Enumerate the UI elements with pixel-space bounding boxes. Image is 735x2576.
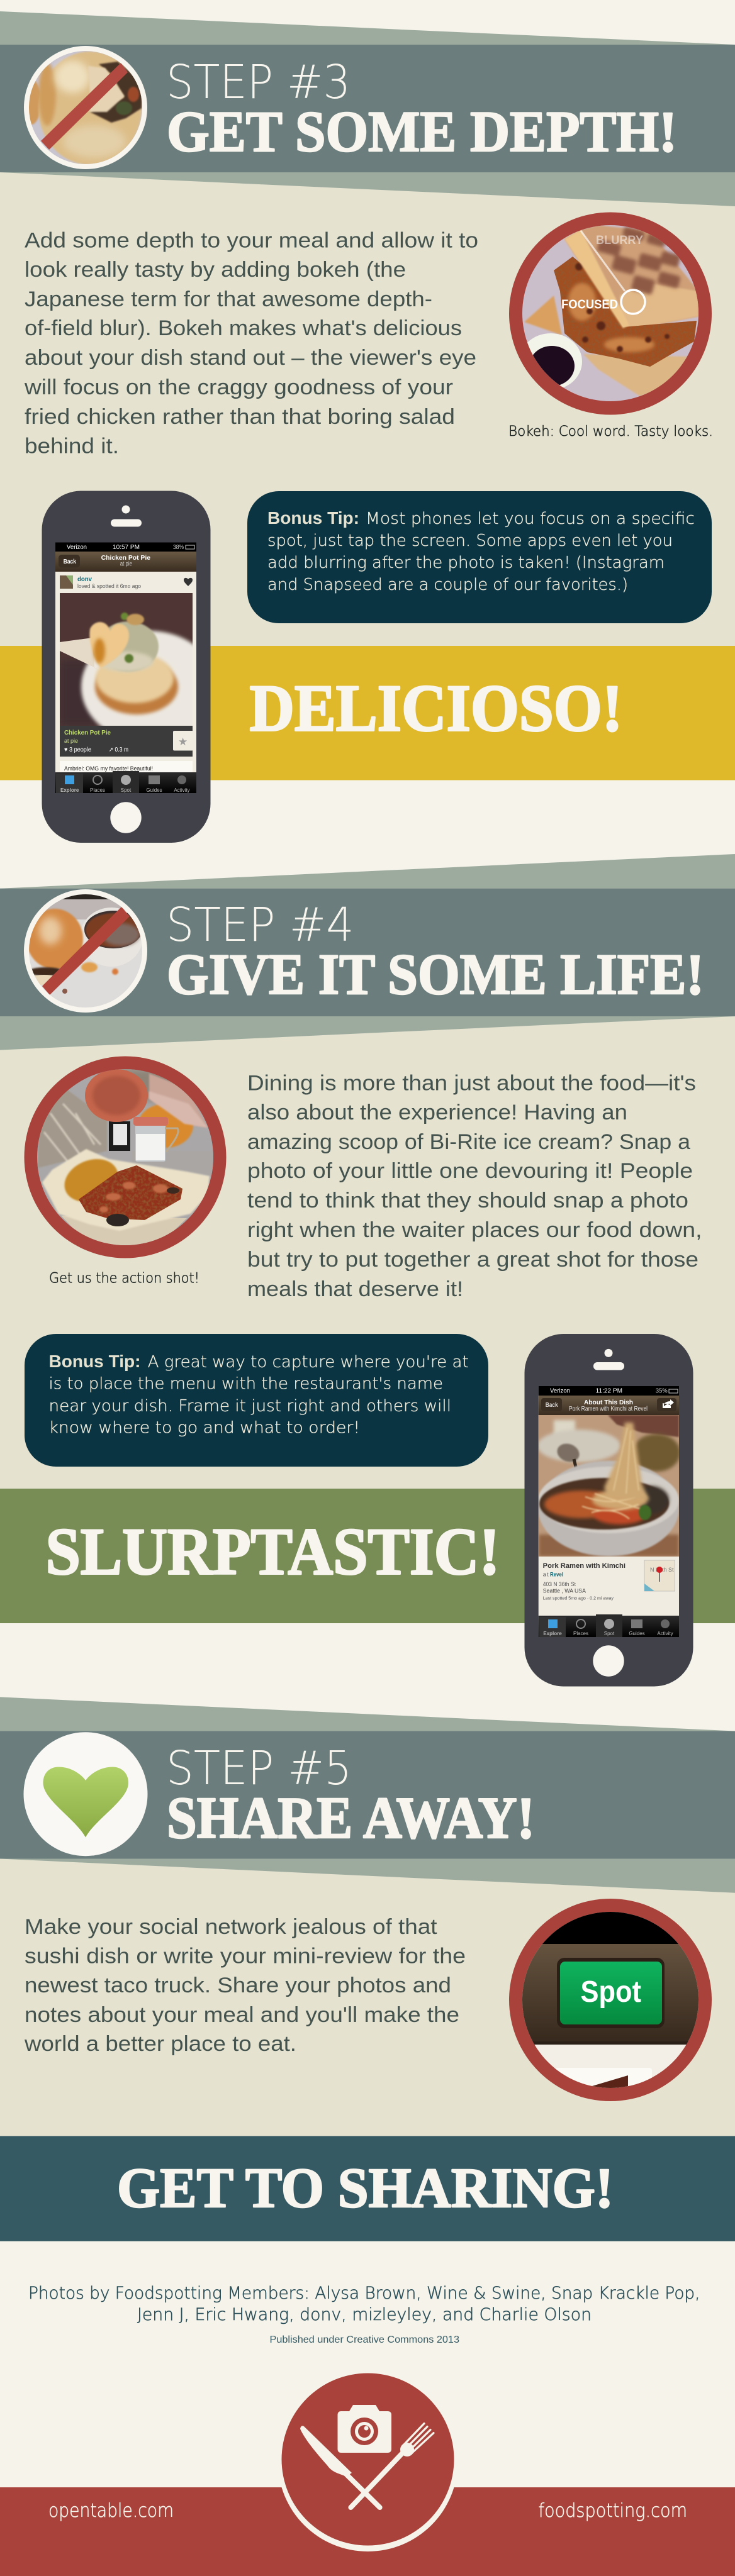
icon: phone with ramen app screen: Activity xyxy=(657,1631,673,1636)
text block: step 4 intro: photo of your little one devouring it! People xyxy=(247,1159,693,1183)
heading: step number: STEP #4 xyxy=(166,898,354,952)
callout: bonus tip 4: know where to go and what to order! xyxy=(49,1419,360,1438)
panel: step 5 xyxy=(0,1697,735,2136)
step 5 body background xyxy=(0,1858,735,2136)
text block: step 5 intro: world a better place to eat. xyxy=(24,2032,296,2056)
callout: bonus tip 4: A great way to capture where you're at xyxy=(148,1353,469,1372)
label: focused: FOCUSED xyxy=(561,298,618,312)
photo: naan plate action shot xyxy=(24,1057,227,1258)
heading: step number: STEP #5 xyxy=(166,1741,352,1796)
icon: phone with chicken pot pie app screen: 10:57 PM xyxy=(113,544,140,551)
panel: footer xyxy=(0,2372,735,2576)
text block: step 3 intro: fried chicken rather than that boring salad xyxy=(25,405,455,429)
callout: bonus tip 3 xyxy=(247,491,712,623)
text block: step 4 intro: Dining is more than just about the food—it's xyxy=(247,1072,696,1096)
icon: phone with ramen app screen: Seattle , WA USA xyxy=(543,1587,586,1594)
icon: phone with ramen app screen: Pork Ramen with Kimchi at Revel xyxy=(569,1406,648,1413)
step 3 body background xyxy=(0,172,735,646)
icon: phone with ramen app screen: Last spotted 5mo ago · 0.2 mi away xyxy=(543,1596,614,1601)
text block: step 3 intro: will focus on the craggy goodness of your xyxy=(24,375,453,399)
photo: chicken and waffle bokeh xyxy=(509,213,712,415)
icon: phone with ramen app screen: Verizon xyxy=(550,1388,570,1395)
panel: step 3 xyxy=(0,11,735,843)
step 4 body background xyxy=(0,1016,735,1489)
text block: photo credits: Jenn J, Eric Hwang, donv, mizleyley, and Charlie Olson xyxy=(137,2305,592,2324)
text block: step 4 intro: meals that deserve it! xyxy=(247,1277,463,1301)
panel: slurptastic banner xyxy=(0,1489,735,1623)
text block: step 4 intro: right when the waiter places our food down, xyxy=(247,1218,702,1242)
icon: phone with chicken pot pie app screen: at pie xyxy=(120,561,132,567)
callout: bonus tip 4 xyxy=(25,1334,488,1467)
text block: step 3 intro: about your dish stand out – the viewer's eye xyxy=(25,346,476,370)
icon: phone with chicken pot pie app screen: ➚ 0.3 m xyxy=(109,747,128,753)
icon: phone with chicken pot pie app screen: loved & spotted it 6mo ago xyxy=(77,583,141,589)
text block: step 3 intro: Japanese term for that awesome depth- xyxy=(25,287,432,311)
icon: phone with chicken pot pie app screen: Back xyxy=(64,558,76,565)
icon: phone with ramen app screen: at xyxy=(543,1572,549,1578)
icon: phone with chicken pot pie app screen: Guides xyxy=(146,787,162,793)
callout: bonus tip 4: is to place the menu with the restaurant's name xyxy=(49,1375,443,1394)
icon: phone with ramen app screen: Places xyxy=(573,1631,588,1636)
text block: step 5 intro: sushi dish or write your mini-review for the xyxy=(25,1945,466,1968)
button: spot: Spot xyxy=(580,1975,641,2009)
caption: bokeh: Bokeh: Cool word. Tasty looks. xyxy=(508,424,713,440)
icon: phone with chicken pot pie app screen: Activity xyxy=(174,787,190,793)
text block: step 3 intro: of-field blur). Bokeh makes what's delicious xyxy=(25,316,462,340)
text block: step 5 intro: Make your social network jealous of that xyxy=(25,1915,437,1939)
caption: action shot: Get us the action shot! xyxy=(49,1270,199,1287)
icon: crossed-out burger and soup photo xyxy=(24,889,147,1013)
text block: step 3 intro: Add some depth to your meal and allow it to xyxy=(25,229,478,253)
heading: step number: STEP #3 xyxy=(166,55,351,109)
icon: phone with ramen app screen: Back xyxy=(546,1402,558,1409)
button: spot xyxy=(557,1958,665,2028)
icon: phone with chicken pot pie app screen: Explore xyxy=(60,787,79,793)
icon: phone with chicken pot pie app screen: ★ xyxy=(178,736,188,748)
text block: step 5 intro: notes about your meal and you'll make the xyxy=(25,2003,459,2027)
icon: phone with ramen app screen: Explore xyxy=(543,1631,562,1636)
icon: phone with chicken pot pie app screen: Chicken Pot Pie xyxy=(101,555,150,562)
link: foodspotting: foodspotting.com xyxy=(539,2500,687,2522)
text block: step 4 intro: amazing scoop of Bi-Rite ice cream? Snap a xyxy=(247,1130,690,1154)
icon: phone with ramen app screen: Spot xyxy=(604,1631,615,1636)
text block: photo credits: Published under Creative Commons 2013 xyxy=(269,2334,459,2345)
callout: bonus tip 3: spot, just tap the screen. Some apps even let you xyxy=(267,531,673,550)
text block: photo credits: Photos by Foodspotting Members: Alysa Brown, Wine & Swine, Snap Krackle Pop, xyxy=(28,2284,700,2303)
icon: phone with ramen app screen: 35% xyxy=(656,1388,668,1395)
text block: step 4 intro xyxy=(247,1072,702,1301)
text block: step 3 intro: behind it. xyxy=(25,434,119,458)
text block: step 3 intro xyxy=(24,229,478,458)
icon: phone with ramen app screen: 403 N 36th St xyxy=(543,1581,576,1587)
icon: phone with chicken pot pie app screen: donv xyxy=(77,576,92,583)
heading: get some depth: GET SOME DEPTH! xyxy=(167,99,677,164)
step 5 header banner xyxy=(0,1697,735,1893)
text block: step 4 intro: but try to put together a great shot for those xyxy=(247,1248,699,1272)
callout: bonus tip 4: Bonus Tip: xyxy=(49,1352,141,1371)
panel: delicioso banner xyxy=(0,646,735,780)
icon: phone with ramen app screen xyxy=(525,1334,693,1687)
icon: crossed-out pie photo xyxy=(22,46,147,169)
label: blurry: BLURRY xyxy=(596,234,643,247)
icon: phone with chicken pot pie app screen xyxy=(42,491,217,843)
icon: phone with chicken pot pie app screen: at pie xyxy=(64,738,78,744)
heading: delicioso: DELICIOSO! xyxy=(249,672,623,745)
photo: spot button xyxy=(509,1899,712,2101)
icon: phone with ramen app screen: Pork Ramen with Kimchi xyxy=(543,1562,626,1570)
heading: give it some life: GIVE IT SOME LIFE! xyxy=(167,942,704,1006)
step 3 header banner xyxy=(0,11,735,206)
icon: phone with chicken pot pie app screen: ♥ 3 people xyxy=(64,747,91,753)
text block: step 3 intro: look really tasty by adding bokeh (the xyxy=(25,258,406,282)
icon: phone with chicken pot pie app screen: Places xyxy=(90,787,105,793)
icon: green heart badge xyxy=(24,1732,147,1856)
callout: focus ring and leader line xyxy=(581,231,645,314)
icon: phone with chicken pot pie app screen: 38% xyxy=(173,544,184,551)
icon: phone with ramen app screen: N 36th St xyxy=(650,1567,674,1573)
icon: phone with ramen app screen: About This Dish xyxy=(584,1399,633,1406)
link: opentable: opentable.com xyxy=(48,2500,174,2522)
panel: get to sharing banner xyxy=(0,2136,735,2241)
callout: bonus tip 3: add blurring after the photo is taken! (Instagram xyxy=(267,553,665,572)
callout: bonus tip 3: Bonus Tip: xyxy=(267,508,359,528)
icon: phone with chicken pot pie app screen: Verizon xyxy=(67,544,87,551)
panel: step 4 xyxy=(0,854,735,1687)
step 4 header banner xyxy=(0,854,735,1050)
text block: step 5 intro: newest taco truck. Share your photos and xyxy=(25,1974,451,1997)
text block: step 4 intro: also about the experience! Having an xyxy=(247,1101,627,1124)
callout: bonus tip 4: near your dish. Frame it just right and others will xyxy=(49,1397,451,1416)
heading: share away: SHARE AWAY! xyxy=(167,1785,535,1851)
callout: bonus tip 3: Most phones let you focus on a specific xyxy=(366,509,695,528)
icon: phone with chicken pot pie app screen: Chicken Pot Pie xyxy=(64,730,111,736)
callout: bonus tip 3: and Snapseed are a couple of our favorites.) xyxy=(267,575,628,594)
heading: slurptastic: SLURPTASTIC! xyxy=(45,1514,500,1589)
icon: phone with chicken pot pie app screen: Spot xyxy=(121,787,132,793)
heading: get to sharing: GET TO SHARING! xyxy=(117,2157,614,2219)
icon: logo badge with camera, knife and fork xyxy=(278,2372,458,2551)
icon: phone with ramen app screen: Revel xyxy=(550,1572,563,1578)
text block: step 4 intro: tend to think that they should snap a photo xyxy=(247,1189,688,1213)
text block: photo credits xyxy=(28,2284,700,2345)
icon: phone with ramen app screen: Guides xyxy=(629,1631,645,1636)
text block: step 5 intro xyxy=(24,1915,466,2056)
icon: phone with chicken pot pie app screen: Ambriel: OMG my favorite! Beautiful! xyxy=(64,765,153,772)
icon: phone with ramen app screen: 11:22 PM xyxy=(596,1388,622,1395)
